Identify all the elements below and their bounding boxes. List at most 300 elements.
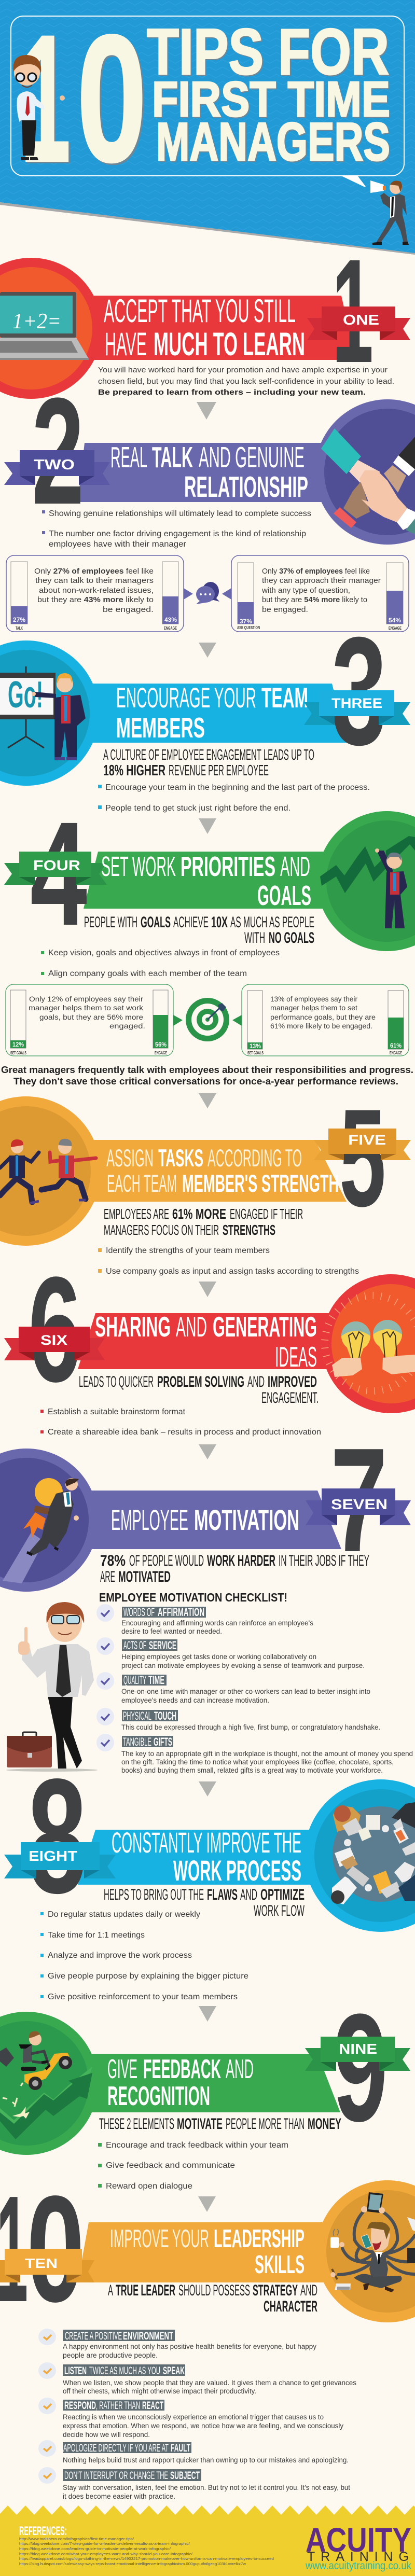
checklist: quality time: employee's needs and can increase motivation. [121, 1696, 269, 1704]
arrow [199, 1282, 216, 1297]
number 7: 7 [330, 1417, 388, 1583]
heading [95, 1311, 317, 1373]
stat box: set goals left: goals, but they are 56% more [39, 1013, 143, 1021]
banner [78, 2222, 327, 2282]
arrow [199, 1781, 216, 1797]
stat box: set goals right [242, 984, 409, 1056]
checklist: words of affirmation: AFFIRMATION [158, 1606, 204, 1619]
checklist: positive environment: ENVIRONMENT [123, 2330, 173, 2342]
arrow [199, 1093, 216, 1108]
subheading [104, 1886, 305, 1919]
heading [110, 441, 308, 504]
checklist: acts of service: Helping employees get tasks done or working collaboratively on [121, 1653, 316, 1661]
icon: target [173, 998, 242, 1041]
checklist: physical touch: This could be expressed through a high five, first bump, or congratulatory handshake. [121, 1723, 380, 1731]
ribbon: nine [305, 2037, 410, 2071]
bullets: Give positive reinforcement to your team members [48, 1993, 238, 2001]
subheading: 18% HIGHER [103, 762, 165, 779]
stat box: ask question: they can approach their manager [262, 576, 381, 585]
stat box: set goals left: Only 12% of employees say their [29, 995, 143, 1003]
checklist: physical touch [96, 1708, 380, 1731]
stat box: set goals right: performance goals, but they are [270, 1013, 376, 1021]
ribbon: three [304, 690, 410, 725]
circle with multitasking man [316, 2180, 415, 2322]
callout: great managers: They don't save those critical conversations for once-a-year performance reviews. [13, 1076, 398, 1087]
checklist: respond: Reacting is when we unconsciously experience an emotional trigger that causes us to [63, 2413, 324, 2421]
ribbon: six [4, 1327, 105, 1360]
circle with laptop: 1+2= [12, 310, 61, 333]
illustration: man with megaphone [370, 180, 409, 245]
ribbon: nine: NINE [339, 2041, 377, 2057]
bullets: Use company goals as input and assign tasks according to strengths [106, 1267, 359, 1276]
number 1: 1 [332, 229, 374, 394]
subheading: SHOULD POSSESS [178, 2282, 250, 2299]
circle with jetpack man [0, 1449, 98, 1592]
big number 10: 0 [77, 0, 147, 199]
subheading: STRATEGY [253, 2282, 298, 2299]
checklist: respond: , RATHER THAN [96, 2400, 140, 2412]
references list: https://blog.hubspot.com/sales/easy-ways-reps-boost-emotional-intelligence-infographic#sm.000guputfoilgecg103k1xvrelkz7w [19, 2563, 246, 2566]
ribbon: seven: SEVEN [331, 1496, 388, 1512]
stat box: ask question [231, 555, 409, 632]
arrow [197, 402, 216, 420]
subheading: MANAGERS FOCUS ON THEIR [104, 1222, 219, 1238]
stat box: ask question: Only 37% of employees feel like [262, 567, 370, 576]
stat box: set goals right: manager helps them to set [270, 1004, 357, 1012]
heading: ENCOURAGE YOUR [116, 681, 256, 714]
ribbon: seven [306, 1488, 411, 1525]
ribbon: one [307, 307, 410, 340]
panel: footer [0, 2505, 415, 2576]
checklist: listen: off their chests, which might otherwise impact their productivity. [63, 2387, 256, 2395]
checklist: positive environment [38, 2329, 316, 2359]
subheading: ENGAGED IF THEIR [230, 1206, 303, 1222]
banner [88, 296, 356, 360]
heading [104, 293, 305, 363]
checklist: quality time: QUALITY [123, 1674, 146, 1687]
banner [88, 1140, 347, 1202]
subheading: CHARACTER [264, 2298, 317, 2315]
checklist: listen: When we listen, we show people that they are valued. It gives them a chance to get grievances [63, 2379, 356, 2387]
circle with presenter [0, 640, 99, 786]
heading: ACCORDING TO [208, 1144, 302, 1172]
panel: tip 3 [0, 605, 410, 813]
subheading: OPTIMIZE [260, 1886, 305, 1903]
bullets [40, 1408, 321, 1437]
bullets: Keep vision, goals and objectives always in front of employees [48, 949, 280, 957]
stat box: set goals left: SET GOALS [10, 1051, 26, 1055]
subheading [103, 747, 314, 779]
subheading: MOTIVATE [177, 2115, 223, 2133]
heading: MOTIVATION [194, 1503, 299, 1536]
subheading: THESE 2 ELEMENTS [99, 2115, 174, 2133]
circle with lightbulbs [322, 1274, 415, 1413]
bullets [41, 949, 280, 978]
subheading: 10X [211, 914, 228, 931]
number 3: 3 [331, 605, 387, 777]
stat box: talk: ENGAGE [164, 626, 177, 631]
bullets [42, 509, 311, 549]
ribbon: two: TWO [34, 456, 75, 472]
checklist: apologize: FAULT [171, 2442, 190, 2454]
number 2: 2 [32, 367, 84, 536]
arrow [198, 2196, 216, 2212]
subheading: 78% [100, 1552, 126, 1569]
number 8: 8 [27, 1745, 87, 1927]
number 10: 0 [26, 2164, 85, 2333]
checklist: words of affirmation: desire to feel wanted or needed. [121, 1627, 222, 1635]
subheading: AS MUCH AS PEOPLE [230, 914, 314, 931]
references list: https://blog.weekdone.com/what-your-employees-want-and-why-should-you-care-infographic/ [19, 2553, 192, 2556]
circle with scooter rider [0, 2012, 98, 2155]
checklist: tangible gifts: on the gift. Taking the time to notice what your employees like (coffee, chocolate, sports, [121, 1758, 394, 1766]
checklist: don't interrupt: it does become easier with practice. [63, 2493, 175, 2500]
body text: Be prepared to learn from others – including your new team. [98, 388, 366, 397]
checklist: listen: LISTEN [64, 2365, 87, 2377]
checklist: tangible gifts [96, 1734, 413, 1774]
heading: LEADERSHIP [214, 2225, 305, 2253]
heading: TALK [152, 441, 193, 474]
heading: GIVE [107, 2054, 137, 2084]
checklist: don't interrupt: DON'T INTERRUPT OR CHANGE THE [64, 2470, 168, 2482]
checklist: acts of service [96, 1637, 365, 1669]
heading: SKILLS [255, 2251, 305, 2279]
panel: tip 7 [0, 1417, 413, 1774]
subheading: IMPROVED [268, 1373, 317, 1390]
bullets: Give people purpose by explaining the bigger picture [48, 1972, 248, 1981]
subheading: MOTIVATED [118, 1568, 171, 1585]
checklist: words of affirmation [96, 1604, 313, 1635]
arrow [199, 2006, 216, 2022]
checklist: apologize: Nothing helps build trust and rapport quicker than owning up to our mistakes and apologizing. [63, 2456, 349, 2464]
ribbon: three: THREE [331, 695, 382, 711]
bullets: Encourage your team in the beginning and the last part of the process. [105, 783, 370, 792]
bullets: Analyze and improve the work process [48, 1951, 192, 1960]
bullets: Establish a suitable brainstorm format [48, 1408, 186, 1416]
heading: REAL [110, 441, 147, 474]
subheading [104, 1206, 303, 1238]
stat box: set goals left: manager helps them to set work [29, 1004, 144, 1012]
heading: WORK PROCESS [173, 1854, 301, 1887]
arrow [199, 643, 216, 658]
subheading: MONEY [308, 2115, 341, 2133]
bullets: The number one factor driving engagement is the kind of relationship [49, 530, 306, 538]
banner [84, 852, 332, 909]
heading [112, 1826, 301, 1887]
checklist: apologize [38, 2440, 349, 2464]
banner [88, 684, 347, 743]
arrow [199, 818, 216, 834]
subheading: ARE [100, 1568, 115, 1585]
checklist: quality time: One-on-one time with manager or other co-workers can lead to better insight into [121, 1688, 370, 1695]
stat box: set goals right: 13% [250, 1042, 261, 1050]
stat box: set goals right: SET GOALS [247, 1051, 264, 1055]
stat box: ask question: ENGAGE [389, 626, 402, 631]
subheading [84, 914, 314, 946]
heading [101, 851, 311, 911]
panel: tip 1 [0, 229, 410, 399]
heading: HAVE [105, 326, 147, 363]
checklist: words of affirmation: WORDS OF [123, 1606, 155, 1619]
panel: tip 10 [0, 2164, 415, 2500]
bullets: Reward open dialogue [106, 2182, 192, 2191]
references list: http://www.toolshero.com/infographics/first-time-manager-tips/ [19, 2538, 134, 2541]
stat box: set goals right: 13% of employees say their [270, 995, 357, 1003]
stat box: set goals right: 61% [390, 1042, 402, 1049]
bullets [40, 1910, 248, 2001]
stat box: set goals left [6, 984, 173, 1056]
heading: PRIORITIES [181, 851, 275, 882]
checklist: acts of service: SERVICE [149, 1639, 176, 1652]
checklist: positive environment: people are productive people. [63, 2351, 158, 2359]
subheading: PEOPLE MORE THAN [226, 2115, 305, 2133]
bullets [98, 2141, 288, 2191]
heading [106, 1144, 339, 1197]
heading: SET WORK [101, 851, 176, 882]
checklist: respond: REACT [142, 2400, 163, 2412]
bullets: Do regular status updates daily or weekly [48, 1910, 200, 1919]
checklist heading: EMPLOYEE MOTIVATION CHECKLIST! [99, 1591, 287, 1604]
stat box: ask question: 37% [240, 618, 252, 625]
panel: header [0, 0, 415, 255]
bullets: Showing genuine relationships will ultimately lead to complete success [49, 509, 311, 518]
subheading: AND [240, 1886, 257, 1903]
references list: https://leadapparel.com/blogs/logo-clothing-in-the-news/14903217-promotion-makeover-how-uniforms-can-motivate-employees-to-succeed [19, 2557, 274, 2561]
subheading: TRUE LEADER [116, 2282, 175, 2299]
ribbon: six: SIX [40, 1332, 67, 1348]
big number 10: 1 [20, 0, 71, 199]
heading: MEMBERS [116, 712, 205, 744]
subheading: LEADS TO QUICKER [79, 1373, 154, 1390]
subheading: WORK HARDER [207, 1552, 275, 1569]
heading [116, 681, 308, 744]
subheading [79, 1373, 319, 1407]
subheading: STRENGTHS [223, 1222, 275, 1238]
panel: tip 6 [4, 1246, 415, 1437]
checklist: respond: RESPOND [64, 2400, 96, 2412]
subheading: A [108, 2282, 113, 2299]
subheading: PEOPLE WITH [84, 914, 137, 931]
checklist: acts of service: project can motivate employees by evoking a sense of teamwork and purpose. [121, 1662, 365, 1669]
checklist: quality time: TIME [148, 1674, 164, 1687]
stat box: talk: but they are 43% more likely to [37, 595, 154, 604]
stat box: set goals left: ENGAGE [155, 1051, 167, 1055]
heading: AND [280, 851, 310, 882]
bullets: Take time for 1:1 meetings [48, 1931, 145, 1940]
ribbon: eight: EIGHT [29, 1848, 77, 1864]
stat box: talk: TALK [16, 626, 23, 631]
subheading: NO GOALS [269, 929, 314, 946]
banner [88, 2054, 340, 2112]
checklist: listen [38, 2362, 356, 2395]
icon: chat bubbles [184, 582, 231, 604]
stat box: set goals right: ENGAGE [390, 1051, 402, 1055]
banner [78, 1313, 332, 1369]
panel: tip 9: AND [226, 2054, 254, 2084]
checklist: apologize: APOLOGIZE DIRECTLY IF YOU ARE AT [63, 2442, 169, 2454]
subheading: WITH [244, 929, 265, 946]
stat box: ask question: be engaged. [262, 605, 308, 614]
callout: great managers: Great managers frequently talk with employees about their responsibilities and progress. [1, 1065, 413, 1075]
heading: GOALS [257, 880, 311, 911]
checklist: respond [38, 2398, 343, 2439]
checklist: tangible gifts: books) and buying them small, related gifts is a great way to motivate your workforce. [121, 1766, 383, 1774]
subheading: FLAWS [207, 1886, 238, 1903]
subheading: PROBLEM SOLVING [157, 1373, 244, 1390]
bullets: employees have with their manager [49, 540, 186, 549]
checklist: physical touch: TOUCH [154, 1709, 176, 1722]
subheading: ENGAGEMENT. [261, 1389, 319, 1407]
stat box: talk: they can talk to their managers [35, 576, 154, 585]
references list: https://blog.weekdone.com/leaders-guide-to-motivate-people-at-work-infographic/ [19, 2547, 171, 2551]
checklist: listen: SPEAK [163, 2365, 185, 2377]
subheading: REVENUE PER EMPLOYEE [169, 762, 269, 779]
subheading: WORK FLOW [254, 1902, 305, 1919]
subheading: GOALS [141, 914, 171, 931]
subheading [99, 2115, 341, 2133]
circle with laptop [0, 258, 102, 399]
illustration: man with glasses [13, 55, 65, 160]
checklist: listen: TWICE AS MUCH AS YOU [89, 2365, 160, 2377]
checklist: don't interrupt: SUBJECT [170, 2470, 200, 2482]
arrow [199, 1444, 216, 1459]
bullets: People tend to get stuck just right before the end. [105, 804, 290, 813]
panel: tip 4 [1, 791, 415, 1087]
heading: GENERATING [213, 1311, 317, 1343]
subheading [100, 1552, 369, 1585]
references list [19, 2538, 274, 2566]
ribbon: two [4, 450, 110, 485]
heading: RELATIONSHIP [184, 470, 308, 504]
heading: FEEDBACK [143, 2054, 221, 2084]
heading: AND [176, 1311, 207, 1343]
bullets [98, 1246, 359, 1276]
bullets: Encourage and track feedback within your team [106, 2141, 288, 2150]
subheading: 61% MORE [172, 1206, 226, 1222]
circle with running men [0, 1096, 101, 1246]
checklist: quality time [96, 1672, 370, 1704]
bullets: Create a shareable idea bank – results in process and product innovation [48, 1428, 321, 1437]
ribbon: one: ONE [343, 312, 379, 328]
checklist: don't interrupt [38, 2467, 350, 2500]
checklist: don't interrupt: Stay with conversation, listen, feel the emotion. But try not to let it control you. It's not easy, but [63, 2484, 350, 2491]
stat box: talk: about non-work-related issues, [39, 586, 154, 595]
subheading: ACHIEVE [173, 914, 209, 931]
heading: TEAM [261, 681, 308, 714]
checklist: tangible gifts: The key to an appropriate gift in the workplace is thought, not the amount of money you spend [121, 1750, 413, 1758]
heading: AND GENUINE [199, 441, 305, 474]
stat box: ask question: ASK QUESTION [237, 625, 260, 630]
checklist: acts of service: ACTS OF [123, 1639, 146, 1652]
banner [78, 443, 332, 502]
number 6: 6 [28, 1246, 81, 1413]
heading: TASKS [158, 1144, 203, 1172]
ribbon: ten: TEN [25, 2255, 58, 2271]
speech bubble frame [11, 16, 404, 187]
bullets: Identify the strengths of your team members [106, 1246, 270, 1255]
ribbon: five: FIVE [348, 1132, 386, 1148]
checklist: tangible gifts: GIFTS [154, 1735, 172, 1748]
subheading: AND [300, 2282, 317, 2299]
number 4: 4 [30, 791, 88, 956]
heading: SHARING [95, 1311, 171, 1343]
ribbon: five [314, 1129, 411, 1160]
stat box: ask question: but they are 54% more likely to [262, 595, 367, 604]
body text [98, 366, 394, 397]
ribbon: eight [4, 1842, 116, 1878]
banner [88, 1491, 341, 1549]
panel: tip 9 [0, 1982, 410, 2191]
stat box: set goals left: engaged. [109, 1022, 145, 1030]
heading: IMPROVE YOUR [110, 2225, 209, 2253]
circle with chart man [317, 811, 415, 951]
banner [78, 1830, 322, 1885]
stat box: set goals right: 61% more likely to be engaged. [270, 1022, 372, 1030]
heading [107, 2054, 254, 2111]
callout: great managers [1, 1065, 413, 1087]
number 5: 5 [339, 1080, 386, 1235]
circle with presenter: Go! [8, 674, 43, 716]
checklist: respond: decide how we will respond. [63, 2431, 150, 2439]
stat box: ask question: 54% [389, 617, 401, 624]
logo: acuity training: TRAINING [307, 2550, 409, 2564]
checklist: positive environment: A happy environment not only has positive health benefits for everyone, but happy [63, 2343, 316, 2350]
subheading [108, 2282, 317, 2315]
stat box: talk: 27% [13, 616, 25, 623]
ribbon: ten [0, 2249, 94, 2282]
bullets: Align company goals with each member of the team [48, 969, 247, 978]
checklist: positive environment: CREATE A POSITIVE [65, 2330, 122, 2342]
panel: tip 2 [4, 367, 415, 632]
stat box: talk [6, 555, 184, 632]
stat box: talk: Only 27% of employees feel like [34, 567, 154, 576]
references heading: REFERENCES: [19, 2524, 67, 2538]
circle with hands [315, 399, 415, 545]
subheading: EMPLOYEES ARE [104, 1206, 169, 1222]
checklist: respond: express that emotion. When we respond, we notice how we are feeling, and we consciously [63, 2422, 343, 2430]
stat box: ask question: with any type of question, [261, 586, 350, 595]
bullets [98, 783, 370, 813]
illustration: manager with briefcase [6, 1602, 98, 1772]
heading: RECOGNITION [107, 2081, 210, 2111]
body text: You will have worked hard for your promotion and have ample expertise in your [98, 366, 388, 374]
heading [110, 2225, 305, 2279]
panel: tip 5 [0, 1080, 411, 1276]
heading: EACH TEAM [107, 1169, 177, 1197]
subheading: HELPS TO BRING OUT THE [104, 1886, 204, 1903]
checklist: words of affirmation: Encouraging and affirming words can reinforce an employee's [121, 1619, 313, 1627]
stat box: set goals left: 12% [12, 1041, 24, 1048]
stat box: talk: 43% [164, 616, 177, 623]
panel: tip 6: IDEAS [275, 1341, 317, 1373]
heading: EMPLOYEE [111, 1503, 188, 1536]
stat box: talk: be engaged. [103, 605, 154, 614]
ribbon: four [4, 852, 107, 885]
references list: https://blog.weekdone.com/7-step-guide-for-a-leader-to-deliver-results-as-a-team-infographic/ [19, 2542, 190, 2546]
stat box: set goals left: 56% [155, 1041, 167, 1048]
subheading: AND [247, 1373, 265, 1390]
checklist: tangible gifts: TANGIBLE [123, 1735, 151, 1748]
heading: ASSIGN [106, 1144, 154, 1172]
circle with meeting table [305, 1779, 415, 1932]
ribbon: four: FOUR [33, 857, 80, 873]
checklist: physical touch: PHYSICAL [123, 1709, 151, 1722]
bullets: Give feedback and communicate [106, 2161, 235, 2170]
subheading: OF PEOPLE WOULD [129, 1552, 204, 1569]
title [147, 16, 390, 172]
panel: tip 8 [4, 1745, 415, 2001]
body text: chosen field, but you may find that you lack self-confidence in your ability to lead. [98, 377, 394, 386]
